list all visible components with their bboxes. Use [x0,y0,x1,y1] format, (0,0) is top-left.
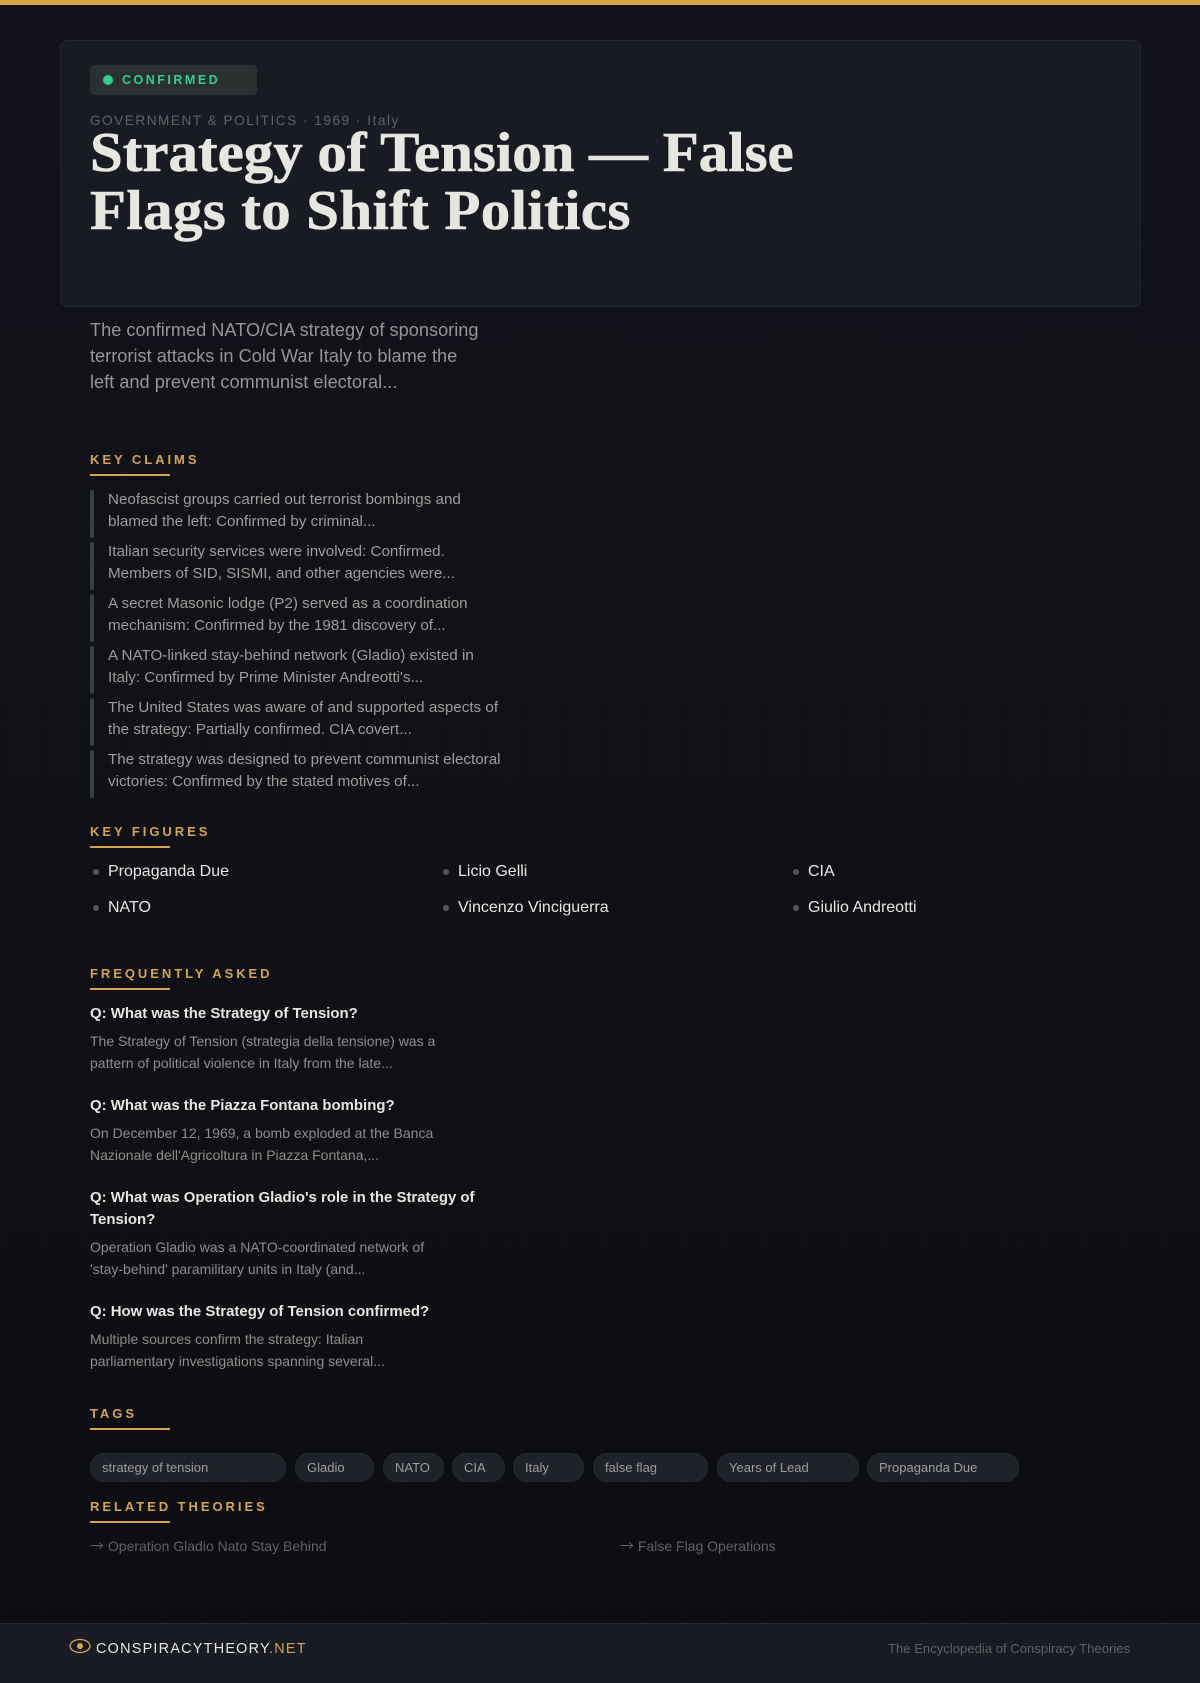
tag pills: strategy of tension [102,1460,208,1475]
panel: key claims list: The strategy was designed to prevent communist electoral [108,751,501,768]
panel: FAQ list: Nazionale dell'Agricoltura in Piazza Fontana,... [90,1147,379,1163]
panel: key figures list: Vincenzo Vinciguerra [458,899,609,916]
title: Strategy of Tension — False [90,122,794,184]
tag pills: Years of Lead [729,1460,809,1475]
panel: FAQ list: The Strategy of Tension (strategia della tensione) was a [90,1033,435,1049]
summary text: left and prevent communist electoral... [90,372,397,392]
link: false flag operations: → False Flag Operations [620,1536,776,1556]
panel: key figures list: CIA [808,863,835,880]
footer tagline: The Encyclopedia of Conspiracy Theories [888,1641,1130,1656]
panel: FAQ list: 'stay-behind' paramilitary units in Italy (and... [90,1261,365,1277]
heading: frequently asked: FREQUENTLY ASKED [90,966,273,981]
panel: FAQ list [90,1005,475,1369]
panel: key claims list: mechanism: Confirmed by the 1981 discovery of... [108,617,446,634]
summary text: terrorist attacks in Cold War Italy to blame the [90,346,457,366]
panel: key figures list: Licio Gelli [458,863,527,880]
status badge: confirmed [90,65,257,95]
panel: FAQ list: Tension? [90,1211,155,1228]
category and date meta line: GOVERNMENT & POLITICS · 1969 · Italy [90,113,400,128]
panel: key figures list: Propaganda Due [108,863,229,880]
logo wordmark: CONSPIRACYTHEORY.NET [96,1641,307,1657]
panel: key claims list: The United States was aware of and supported aspects of [108,699,498,716]
panel: FAQ list: pattern of political violence in Italy from the late... [90,1055,393,1071]
header card [60,40,1141,307]
title [90,122,794,242]
summary text [90,320,479,392]
summary text: The confirmed NATO/CIA strategy of sponsoring [90,320,479,340]
icon: status dot [103,75,113,85]
panel: FAQ list: On December 12, 1969, a bomb exploded at the Banca [90,1125,433,1141]
heading: related theories: RELATED THEORIES [90,1499,268,1514]
panel: FAQ list: Q: What was Operation Gladio's role in the Strategy of [90,1189,475,1206]
panel: key figures list [93,863,917,916]
tag pills: false flag [605,1460,657,1475]
panel: FAQ list: Q: What was the Strategy of Tension? [90,1005,358,1022]
tag pills: Italy [525,1460,549,1475]
panel: FAQ list: Q: What was the Piazza Fontana bombing? [90,1097,395,1114]
panel: FAQ list: Multiple sources confirm the strategy: Italian [90,1331,363,1347]
tag pills: Propaganda Due [879,1460,977,1475]
panel: key claims list [90,490,501,798]
heading: tags: TAGS [90,1406,137,1421]
badge label: CONFIRMED [122,73,220,87]
heading: key claims: KEY CLAIMS [90,452,199,467]
panel: key figures list: NATO [108,899,151,916]
panel: key claims list: Italian security services were involved: Confirmed. [108,543,445,560]
panel: FAQ list: parliamentary investigations spanning several... [90,1353,385,1369]
panel: key claims list: blamed the left: Confirmed by criminal... [108,513,376,530]
footer [0,1623,1200,1683]
icon: eye logo [69,1638,91,1654]
title: Flags to Shift Politics [90,180,631,242]
panel: key claims list: A secret Masonic lodge (P2) served as a coordination [108,595,468,612]
heading: key figures: KEY FIGURES [90,824,210,839]
panel: key claims list: Members of SID, SISMI, and other agencies were... [108,565,455,582]
panel: key claims list: the strategy: Partially confirmed. CIA covert... [108,721,412,738]
tag pills [90,1453,1019,1482]
panel: key claims list: Neofascist groups carried out terrorist bombings and [108,491,461,508]
panel: key claims list: Italy: Confirmed by Prime Minister Andreotti's... [108,669,423,686]
panel: FAQ list: Operation Gladio was a NATO-coordinated network of [90,1239,424,1255]
link: operation gladio: → Operation Gladio Nato Stay Behind [90,1536,327,1556]
tag pills: Gladio [307,1460,345,1475]
tag pills: NATO [395,1460,430,1475]
panel: key claims list: A NATO-linked stay-behind network (Gladio) existed in [108,647,474,664]
top accent bar [0,0,1200,5]
panel: FAQ list: Q: How was the Strategy of Tension confirmed? [90,1303,429,1320]
tag pills: CIA [464,1460,486,1475]
panel: key claims list: victories: Confirmed by the stated motives of... [108,773,419,790]
panel: key figures list: Giulio Andreotti [808,899,917,916]
